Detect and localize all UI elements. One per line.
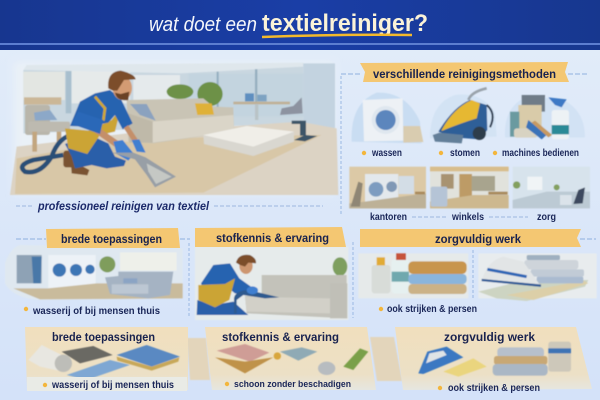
image: towels and bottles	[358, 253, 468, 298]
hose	[22, 134, 75, 172]
label strip	[27, 377, 187, 391]
gloves	[113, 140, 134, 161]
carpet	[15, 135, 322, 194]
image: kantoren	[349, 167, 426, 208]
panel: zorgvuldig werk (lower card)	[395, 327, 592, 394]
panel: brede toepassingen (lower card)	[25, 327, 188, 391]
apron	[65, 108, 121, 154]
panel: zorgvuldig werk (upper)	[353, 229, 597, 318]
mattress	[203, 126, 294, 156]
heading ribbon	[360, 62, 569, 82]
panel: verschillende reinigingsmethoden	[341, 62, 590, 223]
labels: sectors: kantoren	[370, 212, 407, 223]
heading ribbon: stofkennis & ervaring	[216, 231, 329, 245]
office desk	[233, 93, 303, 120]
image: zorg	[513, 167, 590, 208]
arms	[97, 130, 117, 144]
icon: steam cleaner	[430, 88, 497, 143]
heading ribbon: verschillende reinigingsmethoden	[373, 67, 556, 81]
labels: sectors	[370, 212, 556, 223]
labels: methods: machines bedienen	[502, 148, 579, 159]
icon: cleaning products	[505, 95, 585, 139]
heading: stofkennis & ervaring	[222, 330, 339, 344]
panel: stofkennis & ervaring (upper)	[189, 227, 348, 320]
label: schoon zonder beschadigen	[234, 379, 351, 390]
heading: brede toepassingen	[52, 330, 155, 344]
icon: washing machine	[352, 93, 423, 143]
legs	[65, 135, 126, 168]
boots	[63, 151, 89, 175]
iron, towels and jar	[418, 342, 571, 377]
heading ribbon: brede toepassingen	[61, 232, 162, 246]
label: ook strijken & persen	[387, 303, 477, 315]
heading: zorgvuldig werk	[444, 330, 535, 344]
panel: brede toepassingen (upper)	[5, 228, 190, 317]
person cleaning carpet	[22, 71, 176, 187]
floor	[10, 122, 338, 195]
plants	[167, 82, 223, 106]
title	[149, 10, 428, 37]
label: wasserij of bij mensen thuis	[32, 305, 160, 317]
nozzle	[112, 153, 176, 187]
image: winkels	[430, 167, 509, 208]
heading ribbon: zorgvuldig werk	[435, 232, 521, 246]
header banner	[0, 0, 600, 50]
cleaner machine	[292, 121, 317, 141]
heading ribbon	[46, 228, 180, 248]
armchair	[24, 97, 70, 152]
strip between lower cards	[187, 338, 210, 380]
image: person cleaning sofa	[195, 247, 348, 320]
room scene	[10, 63, 338, 195]
labels: methods: wassen	[371, 148, 402, 159]
heading ribbon	[195, 227, 346, 247]
labels: sectors: zorg	[537, 212, 556, 223]
hero caption: professioneel reinigen van textiel	[37, 201, 210, 213]
sofa	[127, 98, 234, 143]
sleeve	[72, 112, 103, 134]
strip between lower cards	[370, 337, 402, 381]
title: textielreiniger?	[262, 10, 428, 37]
person	[197, 300, 248, 315]
labels: sectors: winkels	[451, 212, 484, 223]
heading ribbon	[360, 229, 581, 247]
label: ook strijken & persen	[448, 382, 540, 394]
image: laundry room with sofa	[5, 245, 183, 300]
apron strap	[95, 97, 105, 121]
panel: hero image	[10, 62, 338, 195]
labels: methods: stomen	[450, 148, 480, 159]
panel: stofkennis & ervaring (lower card)	[205, 327, 376, 390]
labels: methods	[362, 148, 579, 159]
label: wasserij of bij mensen thuis	[51, 379, 174, 391]
image: iron and linen	[478, 253, 597, 301]
title: wat doet een	[149, 14, 257, 36]
head	[113, 76, 132, 100]
curtain	[303, 63, 335, 128]
torso	[70, 90, 133, 129]
fabric swatches and products	[215, 344, 368, 375]
sofa	[245, 275, 347, 318]
fabric rolls and swatches	[28, 345, 180, 380]
